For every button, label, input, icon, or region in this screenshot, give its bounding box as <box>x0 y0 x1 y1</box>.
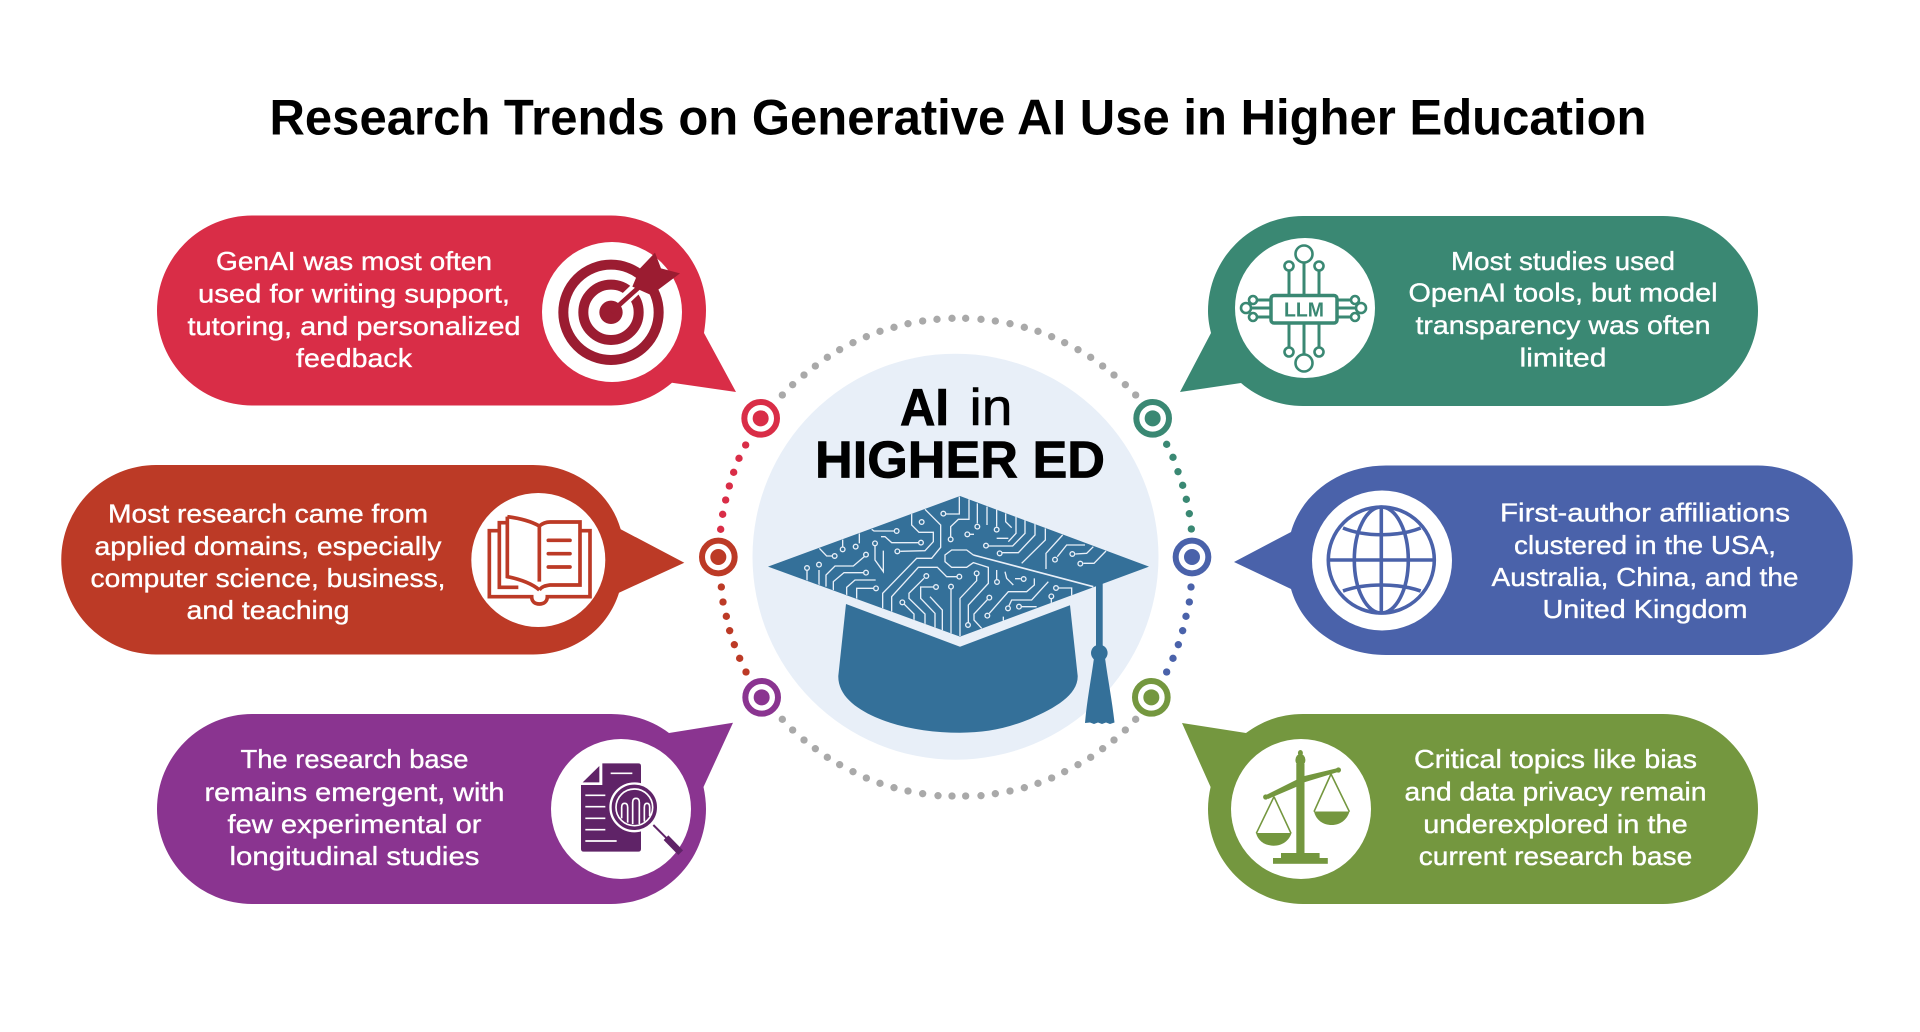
body text: transparency was often <box>1416 310 1710 340</box>
cap base <box>838 604 1078 733</box>
panel: first-author affiliations (blue) <box>1234 466 1853 655</box>
white icon disc <box>1231 739 1371 879</box>
icon: LLM chip <box>1241 246 1366 372</box>
cap tassel <box>1085 583 1114 724</box>
body text <box>204 744 504 871</box>
body text: computer science, business, <box>90 563 446 593</box>
speech bubble <box>157 714 733 904</box>
body text: and data privacy remain <box>1404 777 1706 807</box>
body text: United Kingdom <box>1542 594 1748 624</box>
panel: bias and data privacy (olive) <box>1182 714 1758 904</box>
body text: tutoring, and personalized <box>188 311 520 341</box>
speech bubble <box>1180 216 1758 406</box>
center heading: AI in HIGHER ED: in <box>970 379 1012 437</box>
cap board with circuit traces <box>768 496 1149 637</box>
white icon disc <box>542 242 682 382</box>
white icon disc <box>471 493 605 627</box>
body text: feedback <box>296 343 413 373</box>
center heading: AI in HIGHER ED: AI <box>900 379 949 437</box>
white icon disc <box>1235 238 1375 378</box>
white icon disc <box>1312 490 1452 630</box>
body text <box>1404 744 1706 871</box>
body text <box>1408 246 1718 373</box>
body text: and teaching <box>186 595 350 625</box>
icon: document with magnifier <box>581 763 681 853</box>
panel: OpenAI tools (green) <box>1180 216 1758 406</box>
title: Research Trends on Generative AI Use in Higher Education <box>270 90 1646 146</box>
body text: OpenAI tools, but model <box>1408 278 1718 308</box>
icon: graduation cap with circuit board <box>768 496 1149 733</box>
speech bubble <box>1234 466 1853 655</box>
body text: Australia, China, and the <box>1492 562 1798 592</box>
body text: longitudinal studies <box>230 841 480 871</box>
body text: underexplored in the <box>1423 809 1688 839</box>
speech bubble <box>61 465 684 654</box>
speech bubble <box>1182 714 1758 904</box>
body text: Most studies used <box>1451 246 1675 276</box>
icon: balance scales <box>1256 750 1350 864</box>
panel: applied domains (dark red) <box>61 465 684 654</box>
body text <box>1492 498 1798 624</box>
icon: LLM chip: LLM <box>1284 300 1324 322</box>
body text: few experimental or <box>228 809 482 839</box>
body text: First-author affiliations <box>1500 498 1790 528</box>
body text: GenAI was most often <box>216 246 492 276</box>
body text <box>90 499 446 625</box>
dotted ring connecting the six points <box>702 315 1208 800</box>
panel: emergent research base (purple) <box>157 714 733 904</box>
center heading: AI in HIGHER ED <box>815 379 1105 490</box>
body text: clustered in the USA, <box>1514 530 1776 560</box>
icon: target with arrow <box>563 253 680 360</box>
white icon disc <box>551 739 691 879</box>
center heading: AI in HIGHER ED: HIGHER ED <box>815 432 1105 490</box>
speech bubble <box>157 216 736 406</box>
body text: limited <box>1520 343 1606 373</box>
body text: current research base <box>1419 841 1692 871</box>
panel: writing support and tutoring (red) <box>157 216 736 406</box>
body text: The research base <box>240 744 468 774</box>
icon: open book <box>489 517 590 604</box>
body text <box>188 246 520 373</box>
body text: Critical topics like bias <box>1414 744 1697 774</box>
body text: remains emergent, with <box>204 777 504 807</box>
central light circle <box>752 354 1158 760</box>
body text: applied domains, especially <box>94 531 441 561</box>
body text: used for writing support, <box>198 279 510 309</box>
icon: globe <box>1328 507 1434 613</box>
body text: Most research came from <box>108 499 428 529</box>
